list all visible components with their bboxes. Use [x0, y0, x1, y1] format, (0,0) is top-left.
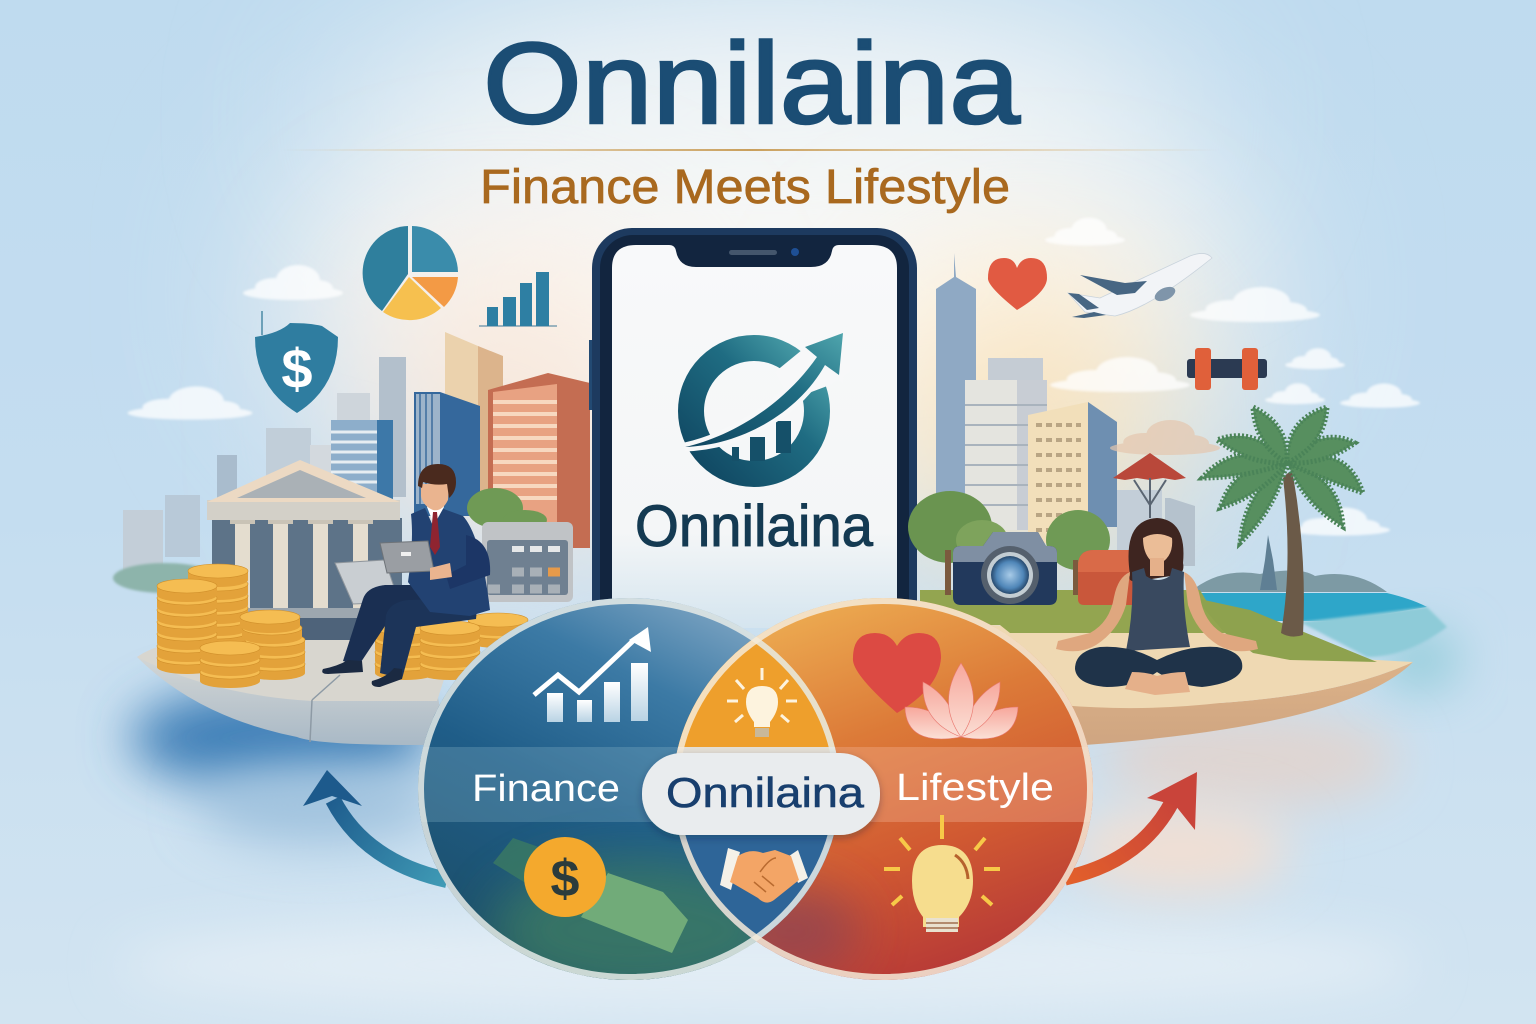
trees [908, 491, 1110, 595]
coin stacks [157, 564, 528, 688]
phone logo wordmark: Onnilaina [635, 494, 874, 559]
subtitle: Finance Meets Lifestyle [480, 161, 1010, 214]
title: Onnilaina [483, 20, 1020, 148]
phone [589, 228, 917, 658]
icon: shield with dollar [255, 311, 338, 413]
icon: shield with dollar: $ [281, 337, 313, 400]
sea and distant hills [1190, 535, 1447, 657]
palm tree [1202, 407, 1363, 637]
pie chart [363, 226, 458, 320]
venn: lifestyle circle [670, 598, 1100, 980]
icon: money and coin: $ [551, 850, 580, 908]
icon: heart in lifestyle circle [853, 633, 941, 713]
icon: growth chart in finance circle [534, 627, 651, 722]
icon: small bulb in overlap [727, 668, 797, 737]
icon: camera [953, 532, 1057, 605]
icon: airplane [1068, 253, 1212, 318]
venn: overlap [421, 601, 1090, 977]
phone logo mark [685, 325, 850, 474]
arrow: finance side [303, 770, 447, 880]
businessman with laptop [322, 464, 490, 687]
icon: heart [988, 258, 1047, 310]
venn: finance circle [418, 598, 756, 980]
divider rule [280, 149, 1220, 151]
label: finance: Finance [472, 768, 620, 810]
platform: finance side [137, 639, 457, 745]
tree behind man [467, 488, 547, 530]
icon: lotus [905, 663, 1018, 739]
icon: money and coin [493, 837, 688, 953]
center pill: Onnilaina [666, 769, 865, 816]
bar chart icon [479, 272, 557, 326]
calculator [482, 522, 573, 602]
icon: red bag [1078, 550, 1134, 605]
center pill [642, 753, 880, 835]
city skyline: lifestyle side [936, 253, 1220, 566]
woman meditating [1056, 518, 1258, 695]
bank building [207, 460, 402, 640]
icon: big light bulb [884, 815, 1000, 932]
city skyline: finance side [113, 332, 590, 593]
arrow: lifestyle side [1065, 772, 1197, 878]
clouds [128, 218, 1420, 536]
icon: handshake [720, 848, 808, 903]
platform: lifestyle side [920, 590, 1413, 745]
label: lifestyle: Lifestyle [896, 767, 1054, 809]
icon: dumbbell [1187, 348, 1267, 390]
icon: parasol [1113, 453, 1186, 518]
